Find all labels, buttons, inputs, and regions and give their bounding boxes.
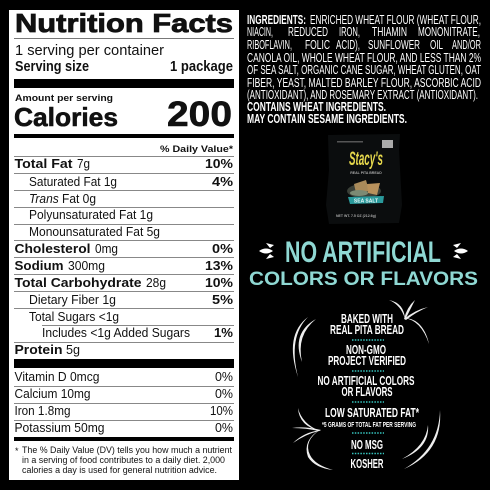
nutrient rows: 5% (212, 293, 233, 307)
serving size: Serving size (15, 58, 89, 75)
vitamins and minerals: 0% (215, 370, 233, 384)
vitamins and minerals: Vitamin D 0mcg (14, 370, 100, 384)
calories: Calories (14, 102, 118, 132)
panel: nutrition facts (9, 8, 239, 480)
ingredients text: SUNFLOWER (368, 38, 420, 52)
ingredients text: REDUCED (288, 25, 328, 39)
nutrient rows: Monounsaturated Fat 5g (29, 225, 160, 239)
benefit: non-gmo: PROJECT VERIFIED (328, 354, 406, 368)
benefit: low saturated fat: LOW SATURATED FAT* (325, 406, 419, 420)
sparkle icon right (453, 243, 468, 259)
footnote: * (15, 446, 19, 456)
vitamins and minerals: Potassium 50mg (14, 421, 105, 435)
arrow: left (293, 317, 316, 377)
benefit: kosher: KOSHER (350, 457, 384, 471)
benefit: no msg: NO MSG (351, 438, 383, 452)
serving size: 1 package (170, 58, 233, 75)
nutrient rows: 28g (146, 276, 166, 290)
heading: colors or flavors: COLORS OR FLAVORS (249, 268, 478, 290)
arrow: top right (389, 300, 429, 344)
nutrient rows: 300mg (68, 259, 105, 273)
footnote (15, 445, 232, 475)
footnote: in a serving of food contributes to a daily diet. 2,000 (22, 455, 225, 465)
flavor banner (348, 196, 384, 204)
nutrient rows: 0mg (95, 242, 118, 256)
calories: 200 (167, 95, 232, 134)
nutrient rows: 10% (205, 276, 233, 290)
product bag: Stacy's pita chips: REAL PITA BREAD (350, 171, 382, 175)
serving size (15, 58, 233, 75)
benefit: low saturated fat: *5 GRAMS OF TOTAL FAT PER SERVING (322, 422, 416, 429)
ingredients text: OIL (430, 38, 443, 52)
servings per container: 1 serving per container (15, 42, 164, 59)
daily value heading: % Daily Value* (160, 144, 234, 154)
nutrient rows: 7g (77, 157, 90, 171)
benefit: no artificial colors: NO ARTIFICIAL COLORS (318, 374, 414, 388)
benefit: no artificial colors: OR FLAVORS (342, 385, 392, 399)
nutrient rows: Total Carbohydrate (14, 276, 142, 290)
ingredients text: FOLIC (305, 38, 330, 52)
chips bowl (347, 184, 381, 198)
ingredients text: INGREDIENTS: (247, 13, 306, 27)
nutrient rows: Saturated Fat 1g (29, 175, 117, 189)
ingredients text: THIAMIN (372, 25, 407, 39)
benefits list (318, 312, 419, 471)
nutrient rows: Sodium (14, 259, 64, 273)
dotted separators (352, 340, 384, 454)
nutrient rows: Cholesterol (14, 242, 90, 256)
nutrient rows: Dietary Fiber 1g (29, 293, 116, 307)
arrow: bottom left (292, 408, 333, 470)
ingredients text (247, 13, 481, 126)
nutrient rows: 13% (205, 259, 233, 273)
benefit: baked with real pita bread: REAL PITA BREAD (330, 323, 404, 337)
nutrient rows: 5g (66, 343, 80, 357)
nutrient rows: 4% (212, 175, 233, 189)
nutrient rows: 1% (214, 326, 233, 340)
vitamins and minerals: 10% (210, 404, 233, 418)
nutrient rows: 0% (212, 242, 233, 256)
swirl arrows (292, 300, 440, 470)
ingredients text: MAY CONTAIN SESAME INGREDIENTS. (247, 112, 407, 126)
nutrient rows: Protein (14, 343, 62, 357)
ingredients text: ACID), (336, 38, 360, 52)
ingredients text: NIACIN, (247, 25, 273, 39)
vitamins and minerals (14, 370, 233, 435)
benefit: baked with real pita bread (330, 312, 404, 337)
title: Nutrition Facts (15, 8, 233, 38)
nutrient rows: Includes <1g Added Sugars (42, 326, 190, 340)
product bag: Stacy's pita chips: NET WT. 7.5 OZ (212.6g) (336, 214, 376, 218)
benefit: non-gmo (328, 343, 406, 368)
ingredients text: IRON, (339, 25, 360, 39)
arrow: bottom right (402, 410, 440, 469)
vitamins and minerals: Calcium 10mg (14, 387, 91, 401)
vitamins and minerals: 0% (215, 421, 233, 435)
calories (14, 95, 232, 134)
amount per serving: Amount per serving (15, 93, 113, 103)
benefit: low saturated fat (322, 406, 419, 429)
vitamins and minerals: 0% (215, 387, 233, 401)
ingredients text: CONTAINS WHEAT INGREDIENTS. (247, 100, 386, 114)
nutrient rows: Polyunsaturated Fat 1g (29, 208, 153, 222)
benefit: no artificial colors (318, 374, 414, 399)
product bag: Stacy's pita chips: SEA SALT (354, 198, 378, 204)
nutrient rows: Trans Fat 0g (29, 192, 96, 206)
divider lines (14, 156, 234, 421)
brand name: Stacy's (349, 149, 383, 170)
footnote: calories a day is used for general nutrition advice. (22, 465, 217, 475)
benefit: non-gmo: NON-GMO (346, 343, 386, 357)
nutrient rows (14, 157, 233, 357)
sparkle icon left (259, 243, 274, 259)
product bag: Stacy's pita chips (326, 134, 402, 224)
vitamins and minerals: Iron 1.8mg (14, 404, 71, 418)
nutrient rows: 10% (205, 157, 233, 171)
benefit: baked with real pita bread: BAKED WITH (341, 312, 393, 326)
nutrient rows: Total Sugars <1g (29, 310, 119, 324)
ingredients text: RIBOFLAVIN, (247, 38, 292, 52)
footnote: The % Daily Value (DV) tells you how much a nutrient (22, 445, 232, 455)
nutrient rows: Total Fat (14, 157, 73, 171)
